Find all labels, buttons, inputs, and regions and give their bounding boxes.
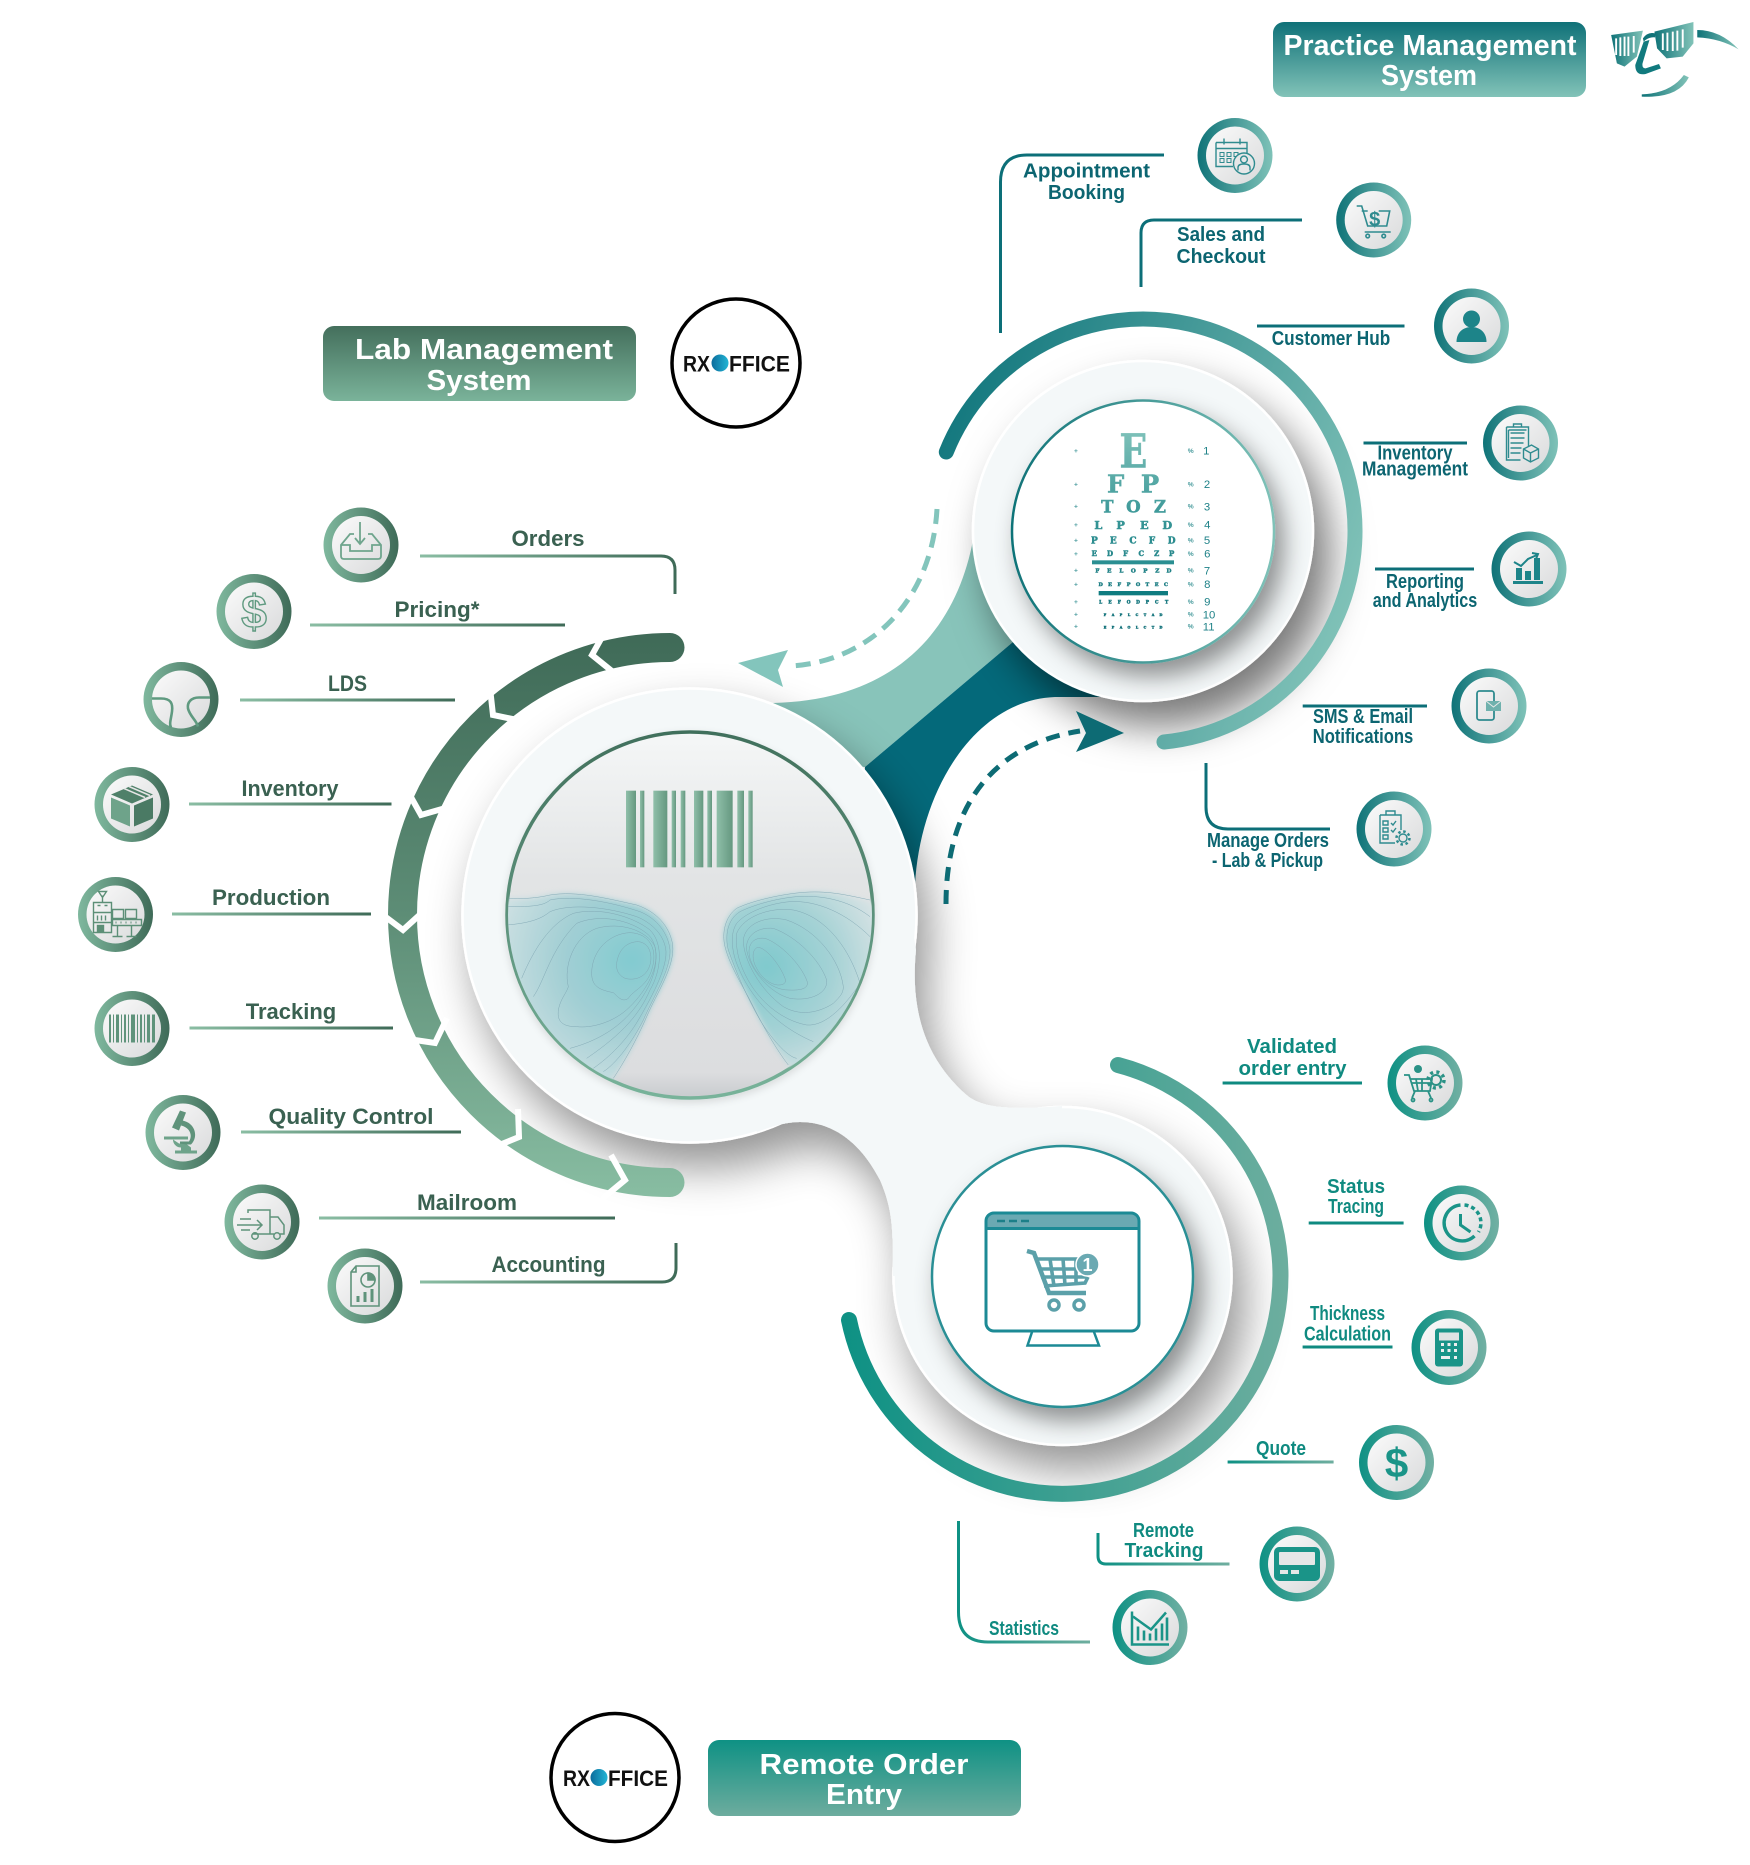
item: Mailroom: Mailroom	[417, 1190, 517, 1215]
heading: Practice Management System: Practice Management	[1284, 30, 1577, 62]
ring: lab management segmented arc	[379, 630, 670, 1199]
icon: monitor with cart	[986, 1213, 1139, 1346]
eye chart letters: LEFODPCT	[1099, 600, 1169, 605]
item: Pricing	[216, 574, 565, 649]
ring: practice management arc	[946, 319, 1355, 742]
eye chart letters: 10	[1203, 609, 1215, 621]
icon: microscope	[146, 1095, 220, 1170]
panel: eye chart plate	[973, 361, 1313, 701]
panel: lab centre disc	[503, 732, 883, 1117]
icon: lens section	[144, 662, 218, 737]
eye chart letters: +++++++++++	[1074, 448, 1078, 631]
eye chart letters: 1	[1203, 445, 1209, 457]
icon: person	[1434, 288, 1509, 364]
item: Reporting and Analytics: Reporting	[1386, 571, 1464, 593]
item: Appointment Booking	[1000, 118, 1272, 333]
icon: inbox	[324, 508, 398, 582]
item: SMS and Email Notifications: Notifications	[1313, 726, 1413, 748]
item: Status Tracing: Status	[1327, 1176, 1385, 1198]
item: LDS	[144, 662, 455, 737]
item: Quote: Quote	[1256, 1438, 1306, 1460]
icon: clipboard with gear	[1356, 792, 1432, 866]
item: LDS: LDS	[328, 671, 367, 696]
logo: RxOffice top: RX	[683, 352, 710, 376]
icon: bar chart with trend	[1492, 532, 1566, 606]
heading: Lab Management System: System	[426, 365, 532, 397]
eye chart letters: FP	[1107, 470, 1159, 499]
panel: remote order disc with monitor	[932, 1146, 1193, 1407]
heading: Remote Order Entry	[708, 1740, 1021, 1816]
item: Quality Control	[146, 1095, 461, 1170]
item: SMS and Email Notifications	[1303, 668, 1526, 748]
eye chart letters: EDFCZP	[1092, 549, 1175, 558]
item: Statistics: Statistics	[989, 1618, 1059, 1640]
item: Manage Orders	[1206, 763, 1432, 872]
item: Sales and Checkout: Checkout	[1176, 246, 1266, 268]
arrow: dashed flow from practice to lab	[738, 509, 937, 687]
eye chart letters: 7	[1204, 565, 1210, 577]
item: Orders	[324, 508, 675, 594]
eye chart letters: 11	[1203, 621, 1215, 633]
item: Validated order entry: Validated	[1247, 1036, 1337, 1058]
item: Quote	[1228, 1425, 1434, 1500]
icon: report	[328, 1248, 402, 1324]
eye chart letters: 3	[1204, 502, 1210, 514]
eye chart letters: FELOPZD	[1095, 569, 1172, 575]
icon: dollar	[1359, 1425, 1434, 1500]
panel: remote order items	[958, 1036, 1499, 1665]
item: Inventory Management: Management	[1362, 458, 1468, 480]
logo: RxOffice top: FFICE	[729, 352, 790, 376]
icon: delivery truck	[224, 1184, 300, 1260]
item: Status Tracing	[1309, 1176, 1499, 1260]
item: Tracking: Tracking	[246, 999, 336, 1024]
eye chart letters: 2	[1204, 479, 1210, 491]
eye chart letters: 6	[1204, 549, 1210, 561]
eye chart letters: TOZ	[1101, 497, 1166, 517]
item: Production	[78, 877, 371, 952]
barcode	[626, 791, 753, 867]
icon: cart with dollar	[1336, 182, 1411, 258]
item: Remote Tracking: Tracking	[1124, 1540, 1204, 1562]
heading: Lab Management System	[323, 326, 636, 401]
eye chart letters: EPAOLCTD	[1104, 625, 1163, 629]
eye chart letters: 5	[1204, 535, 1210, 547]
item: Reporting and Analytics	[1373, 532, 1566, 612]
icon: dollar: $	[241, 586, 267, 638]
logo: RxOffice bottom: RX	[563, 1766, 590, 1791]
item: Validated order entry: order entry	[1238, 1058, 1347, 1080]
icon: barcode	[94, 991, 170, 1066]
item: Inventory	[94, 767, 392, 842]
heading: Remote Order Entry: Remote Order	[760, 1749, 968, 1781]
item: Manage Orders: - Lab & Pickup	[1212, 850, 1323, 872]
heading: Practice Management System: System	[1381, 60, 1477, 92]
item: Inventory: Inventory	[242, 776, 339, 801]
item: Production: Production	[212, 885, 330, 910]
item: Accounting	[328, 1243, 676, 1324]
item: Customer Hub: Customer Hub	[1272, 328, 1390, 350]
heading: Practice Management System	[1273, 22, 1586, 97]
icon: cart with gear	[1388, 1046, 1462, 1120]
ring: remote order arc	[849, 1065, 1280, 1494]
eye chart letters: 4	[1204, 520, 1210, 532]
panel: lab management items	[78, 508, 676, 1324]
item: Inventory Management: Inventory	[1378, 442, 1453, 464]
eye chart letters: %%%%%%%%%%%	[1188, 448, 1194, 631]
icon: box	[94, 767, 170, 842]
icon: dollar	[216, 574, 292, 649]
panel: practice management items	[1000, 118, 1566, 872]
item: Quality Control: Quality Control	[268, 1104, 434, 1129]
item: Accounting: Accounting	[492, 1252, 606, 1277]
icon: dollar: $	[1385, 1440, 1408, 1486]
icon: cart with dollar: $	[1369, 209, 1380, 231]
eye chart letters: FAPLCTAD	[1104, 613, 1163, 617]
item: Remote Tracking	[1098, 1520, 1334, 1602]
item: Tracking	[94, 991, 393, 1066]
item: Pricing: Pricing*	[394, 597, 480, 622]
item: Validated order entry	[1223, 1036, 1462, 1120]
icon: phone with envelope	[1452, 668, 1526, 744]
icon: calendar with person	[1198, 118, 1272, 193]
icon: barcode glasses	[1611, 22, 1739, 97]
item: SMS and Email Notifications: SMS & Email	[1313, 706, 1413, 728]
item: Inventory Management	[1362, 406, 1558, 480]
item: Appointment Booking: Appointment	[1023, 160, 1150, 182]
item: Orders: Orders	[512, 526, 584, 551]
panel: central body joining lab and remote plates	[462, 688, 1232, 1445]
item: Mailroom	[224, 1184, 615, 1260]
icon: factory line	[78, 877, 153, 952]
item: Sales and Checkout: Sales and	[1177, 224, 1265, 246]
eye chart letters: 8	[1204, 579, 1210, 591]
item: Sales and Checkout	[1141, 182, 1411, 287]
item: Thickness Calculation: Thickness	[1310, 1303, 1385, 1325]
eye chart letters: PECFD	[1091, 536, 1176, 546]
badge number: 1	[1082, 1255, 1093, 1275]
arrow: dashed flow from lab to practice	[946, 711, 1124, 904]
connector: dark teal band	[860, 642, 1105, 885]
item: Manage Orders: Manage Orders	[1207, 830, 1329, 852]
logo: RxOffice bottom: FFICE	[608, 1766, 668, 1791]
icon: line and bar chart	[1112, 1590, 1188, 1665]
item: Thickness Calculation: Calculation	[1304, 1324, 1391, 1346]
eye chart letters: E	[1119, 425, 1147, 480]
eye chart letters: 9	[1204, 597, 1210, 609]
heading: Lab Management System: Lab Management	[355, 334, 613, 366]
item: Reporting and Analytics: and Analytics	[1373, 590, 1477, 612]
item: Customer Hub	[1257, 288, 1509, 364]
icon: clipboard with box	[1483, 406, 1558, 480]
item: Status Tracing: Tracing	[1328, 1196, 1384, 1218]
chart: lens thickness contour maps	[503, 791, 883, 1117]
item: Thickness Calculation	[1303, 1303, 1486, 1385]
eye chart letters: DEFPOTEC	[1099, 582, 1168, 588]
heading: Remote Order Entry: Entry	[826, 1779, 902, 1811]
icon: calculator	[1412, 1310, 1486, 1385]
item: Remote Tracking: Remote	[1133, 1520, 1194, 1542]
logo: RxOffice top	[672, 299, 800, 427]
item: Appointment Booking: Booking	[1048, 182, 1125, 204]
eye chart letters	[1074, 425, 1215, 633]
connector: light teal band	[740, 540, 1013, 767]
logo: RxOffice bottom	[551, 1714, 679, 1842]
eye chart letters: LPED	[1094, 518, 1172, 532]
icon: tracking card	[1260, 1526, 1334, 1602]
icon: clock	[1424, 1186, 1499, 1260]
panel: eye chart disc	[1012, 400, 1274, 662]
item: Statistics	[958, 1521, 1188, 1665]
